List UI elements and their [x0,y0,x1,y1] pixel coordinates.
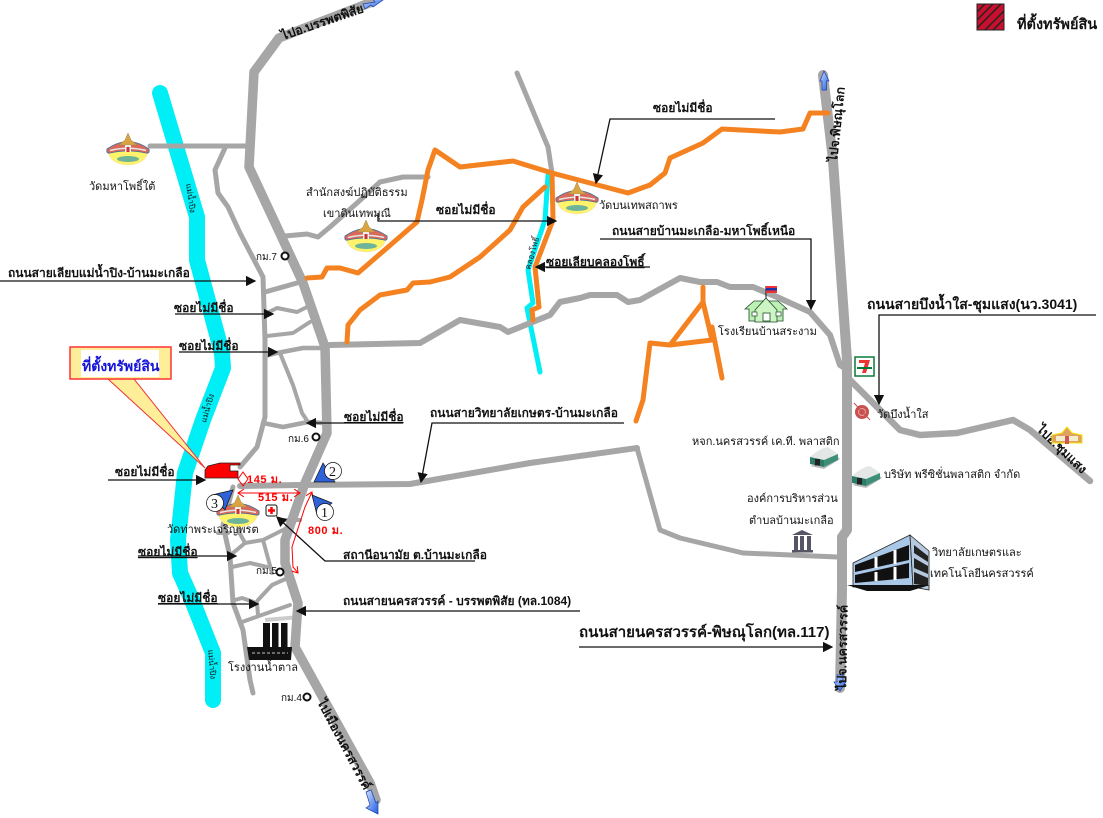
km markers: กม.5 [256,566,277,577]
river: Ping [160,93,223,700]
numbered markers [206,462,342,521]
numbered markers: 1 [321,506,328,521]
road direction labels: ไปอ.บรรพตพิสัย [277,1,365,43]
km markers [256,252,309,704]
distance markers [238,472,343,573]
legend [977,4,1097,33]
numbered markers: 3 [211,497,218,512]
road direction labels: ไปอ.ชุมแสง [1032,420,1090,477]
icon: temple meditation centre [345,220,387,252]
km markers: กม.7 [256,252,277,263]
place labels: วัดบึงน้ำใส [877,406,929,421]
soi labels with leader lines: ถนนสายนครสวรรค์-พิษณุโลก(ทล.117) [579,622,829,642]
icon: SAO building [792,530,813,552]
icon: factories [810,447,882,488]
icon: distant temple [1052,427,1082,444]
soi labels with leader lines: ซอยไม่มีชื่อ [653,99,713,115]
place labels: วิทยาลัยเกษตรและ [931,547,1022,559]
place labels: วัดบนเทพสถาพร [599,200,678,212]
soi labels with leader lines: สถานีอนามัย ต.บ้านมะเกลือ [343,548,487,562]
km markers: กม.4 [281,693,302,704]
river: Ping: แม่น้ำปิง [184,183,199,213]
soi labels with leader lines: ถนนสายบึงน้ำใส-ชุมแสง(นว.3041) [867,293,1077,313]
place labels: บริษัท พรีซิชั่นพลาสติก จำกัด [884,466,1020,481]
place labels [89,178,1034,580]
place labels: วัดท่าพระเจริญพรต [167,524,259,536]
place labels: สำนักสงฆ์ปฏิบัติธรรม [306,186,408,199]
place labels: วัดมหาโพธิ์ใต้ [89,178,155,193]
soi labels with leader lines: ซอยไม่มีชื่อ [115,463,175,479]
soi labels with leader lines: ซอยไม่มีชื่อ [158,589,218,605]
icon: sugar factory [247,623,292,660]
soi labels with leader lines: ซอยเลียบคลองโพธิ์ [546,253,646,269]
soi labels with leader lines: ซอยไม่มีชื่อ [179,337,239,353]
canal: Khlong Pho: คลองโพธิ์ [521,234,542,271]
soi labels with leader lines: ซอยไม่มีชื่อ [344,408,404,424]
callout: property location [70,347,205,468]
label: sugar factory: โรงงานน้ำตาล [228,659,298,674]
numbered markers: 2 [329,465,336,480]
road direction labels [277,1,1090,792]
soi labels with leader lines: ถนนสายวิทยาลัยเกษตร-บ้านมะเกลือ [430,406,618,420]
soi labels with leader lines [0,99,1096,647]
place labels: เทคโนโลยีนครสวรรค์ [930,566,1034,580]
soi labels with leader lines: ถนนสายเลียบแม่น้ำปิง-บ้านมะเกลือ [8,263,190,280]
soi labels with leader lines: ซอยไม่มีชื่อ [436,201,496,217]
icon: school with flag [745,286,787,322]
soi labels with leader lines: ซอยไม่มีชื่อ [138,543,198,559]
place labels: โรงเรียนบ้านสระงาม [718,324,817,338]
property location shape [205,463,240,478]
road direction labels: ไปเมืองนครสวรรค์ [313,695,375,792]
icon: Wat Bueng Nam Sai [854,403,870,420]
icon: temple Wat Maha Pho Tai [107,133,149,165]
soi labels with leader lines: ถนนสายนครสวรรค์ - บรรพตพิสัย (ทล.1084) [343,594,571,608]
icon: health station [266,505,277,516]
distance markers: 145 ม. [247,474,282,486]
place labels: องค์การบริหารส่วน [747,492,838,505]
river: Ping: แม่น้ำปิง [206,649,220,680]
icon: temple Wat Bon Thep Sathaporn [556,182,598,214]
icon: 7-eleven [855,357,874,376]
icon: temple Wat Tha Phra [217,495,259,527]
orange soi roads [307,113,828,421]
canal: Khlong Pho [521,175,548,372]
distance markers: 515 ม. [258,492,293,504]
legend: ที่ตั้งทรัพย์สิน [1017,13,1097,33]
river: Ping: แม่น้ำปิง [197,392,216,424]
soi labels with leader lines: ถนนสายบ้านมะเกลือ-มหาโพธิ์เหนือ [612,222,795,238]
place labels: ตำบลบ้านมะเกลือ [749,514,834,527]
soi labels with leader lines: ซอยไม่มีชื่อ [174,299,234,315]
place labels: เขาดินเทพมุณี [323,207,391,220]
road direction labels: ไปจ.นครสวรรค์ [834,605,850,692]
place labels: หจก.นครสวรรค์ เค.ที. พลาสติก [692,435,840,448]
callout: property location: ที่ตั้งทรัพย์สิน [82,355,160,374]
distance markers: 800 ม. [308,525,343,537]
icon: km marker symbols [276,252,320,700]
km markers: กม.6 [288,434,309,445]
road-end arrows [363,0,846,814]
road direction labels: ไปจ.พิษณุโลก [825,86,849,164]
icon: college building [847,535,930,591]
